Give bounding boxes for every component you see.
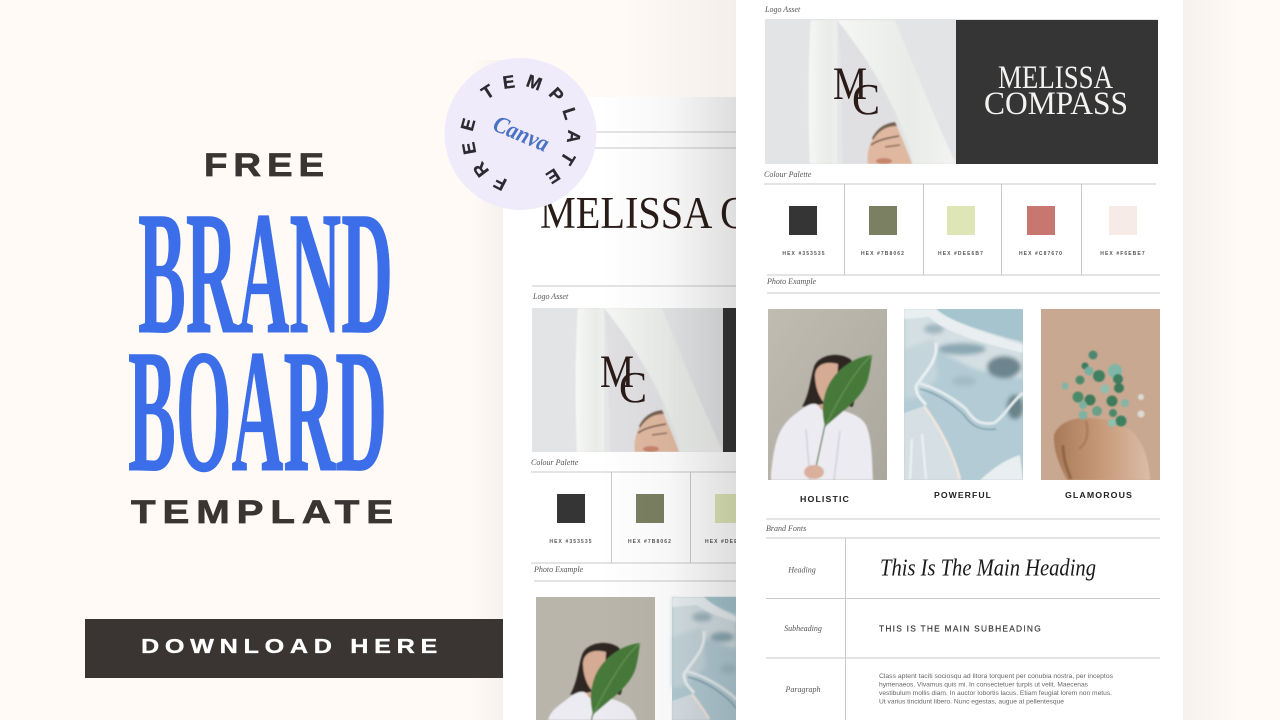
hex labels: HEX #DEE6B7: [938, 251, 984, 257]
hex labels: HEX #F6EBE7: [1100, 251, 1146, 257]
panel: back brand board page: [503, 97, 751, 720]
button: download here: DOWNLOAD HERE: [141, 636, 443, 658]
hex labels: HEX #353535: [782, 251, 826, 257]
paragraph sample: [879, 674, 1113, 706]
MC monogram: C: [852, 75, 880, 124]
photo captions: [800, 491, 1133, 504]
hex labels: HEX #C87670: [1019, 251, 1063, 257]
palette swatches: [789, 206, 1137, 235]
hex labels: [782, 251, 1146, 257]
MC monogram: M: [600, 346, 634, 398]
font row labels: Subheading: [784, 624, 822, 633]
hex labels: [550, 539, 736, 543]
photo captions: HOLISTIC: [800, 495, 850, 504]
shadow of back page: [470, 60, 503, 720]
badge: free template canva: [444, 58, 596, 210]
label: logo asset: Logo Asset: [532, 292, 569, 301]
photo captions: POWERFUL: [934, 491, 992, 500]
label: brand fonts: Brand Fonts: [766, 524, 806, 533]
label: colour palette: Colour Palette: [764, 170, 812, 179]
photo: water: [904, 309, 1023, 480]
font row labels: [784, 566, 822, 694]
photo: woman with leaf: [536, 597, 655, 720]
hex labels: HEX #353535: [549, 539, 593, 545]
MC monogram: C: [619, 363, 647, 412]
brand name: MELISSA C: [540, 188, 747, 238]
hex labels: HEX #7B8062: [861, 251, 905, 257]
MC monogram: [601, 356, 645, 403]
button: download here: [85, 619, 503, 678]
dark logo panel: [956, 20, 1158, 164]
label: logo asset: Logo Asset: [764, 5, 801, 14]
shadow of front page on back page: [600, 97, 736, 720]
badge circular text: FREE TEMPLATE: [460, 74, 580, 191]
shadow of front page on right: [1183, 0, 1243, 720]
heading: TEMPLATE: TEMPLATE: [131, 494, 400, 530]
shadow of front page above back page: [620, 0, 736, 97]
dark logo panel: COMPASS: [984, 86, 1128, 122]
panel: front brand board page: [736, 0, 1183, 720]
photo captions: GLAMOROUS: [1065, 491, 1133, 500]
paragraph sample: hymenaeos. Vivamus quis mi. In consectetuer turpis ut velit. Maecenas: [879, 682, 1088, 688]
hex labels: HEX #7B8062: [628, 539, 672, 545]
subheading sample: THIS IS THE MAIN SUBHEADING: [879, 624, 1042, 634]
logo photo: [765, 20, 956, 164]
MC monogram: M: [833, 58, 867, 110]
label: colour palette: Colour Palette: [531, 458, 579, 467]
paragraph sample: Ut varius tincidunt libero. Nunc egestas, augue at pellentesque: [879, 700, 1065, 706]
heading sample: This Is The Main Heading: [880, 556, 1096, 582]
left headline block: [128, 147, 400, 530]
palette swatches: [557, 494, 736, 523]
font row labels: Paragraph: [784, 685, 821, 694]
photo: woman with leaf: [768, 309, 887, 480]
label: photo example: Photo Example: [533, 565, 584, 574]
paragraph sample: Class aptent taciti sociosqu ad litora torquent per conubia nostra, per inceptos: [879, 674, 1113, 680]
photo: plant and back: [1041, 309, 1160, 480]
paragraph sample: vestibulum mollis diam. In auctor lobortis lacus. Etiam feugiat lorem non metus.: [879, 691, 1112, 697]
font row labels: Heading: [787, 566, 816, 574]
hex labels: HEX #DEE6B7: [705, 539, 751, 545]
heading: FREE: FREE: [204, 147, 330, 183]
label: photo example: Photo Example: [766, 277, 817, 286]
logo photo: [532, 308, 723, 452]
photo: water: [672, 597, 736, 720]
dark logo panel: MELISSA: [998, 60, 1113, 96]
text: BRAND: [138, 176, 393, 371]
text: BOARD: [128, 314, 387, 509]
dark logo panel: [723, 308, 736, 452]
badge Canva script: Canva: [489, 111, 553, 158]
